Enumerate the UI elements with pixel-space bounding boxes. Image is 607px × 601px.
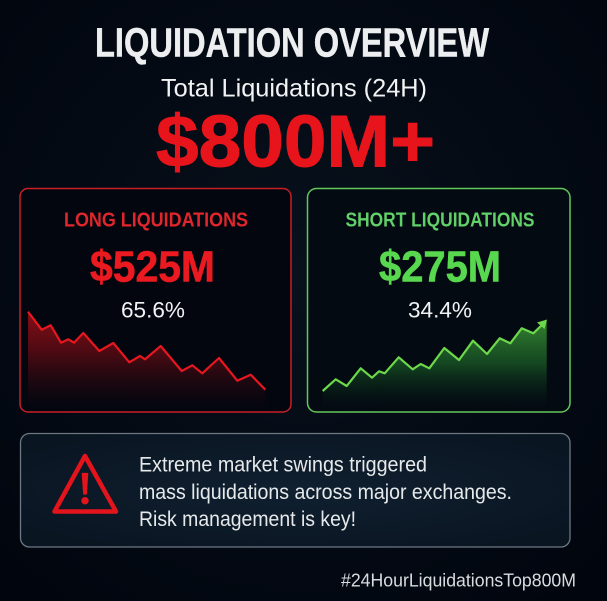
- panel: short liquidations: [308, 188, 570, 412]
- total amount: $800M+: [156, 102, 435, 183]
- short percentage: 34.4%: [408, 298, 472, 322]
- long heading: LONG LIQUIDATIONS: [64, 210, 248, 232]
- panel: warning note: [20, 434, 570, 547]
- short area chart: [323, 320, 547, 408]
- short heading: SHORT LIQUIDATIONS: [346, 210, 534, 232]
- title: LIQUIDATION OVERVIEW: [95, 20, 489, 66]
- arrow head: [537, 320, 547, 329]
- long amount: $525M: [90, 242, 215, 292]
- long area chart: [28, 312, 265, 407]
- warning text: Risk management is key!: [139, 508, 356, 531]
- warning text: mass liquidations across major exchanges.: [139, 481, 512, 504]
- long percentage: 65.6%: [121, 298, 185, 322]
- hashtag: #24HourLiquidationsTop800M: [341, 570, 576, 591]
- warning text: Extreme market swings triggered: [139, 454, 427, 477]
- warning text: [139, 454, 512, 531]
- subtitle: Total Liquidations (24H): [161, 74, 427, 102]
- short amount: $275M: [379, 242, 501, 292]
- icon: warning triangle: [54, 456, 116, 512]
- panel: long liquidations: [20, 188, 291, 412]
